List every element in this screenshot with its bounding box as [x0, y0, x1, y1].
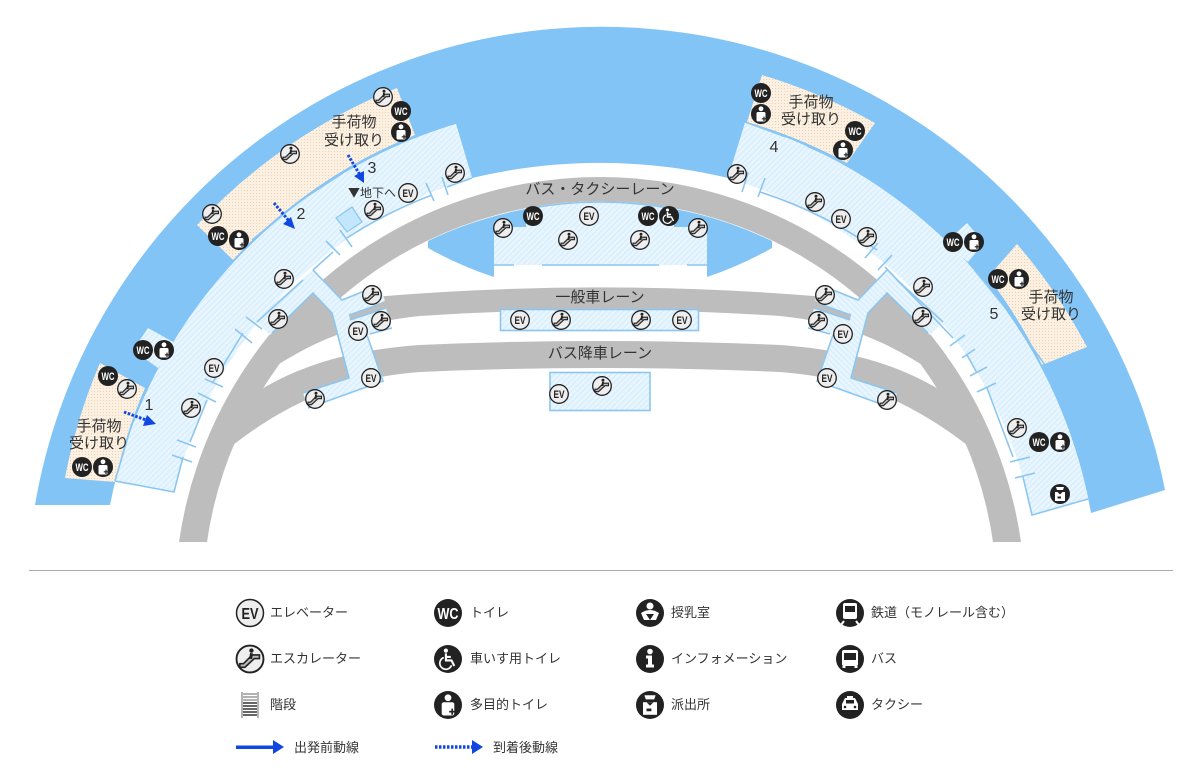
- elevator icons: EV: [208, 363, 220, 375]
- legend: bus: [836, 645, 897, 673]
- baggage claim label lower right: 手荷物: [1028, 289, 1074, 306]
- road label bus drop-off lane: バス降車レーン: [548, 345, 652, 362]
- baggage claim label lower right: [1021, 289, 1081, 323]
- toilet icons: WC: [102, 371, 115, 383]
- baggage claim label upper right: [781, 94, 841, 128]
- baggage claim label lower left: 受け取り: [69, 435, 129, 452]
- baggage claim label lower left: 手荷物: [76, 418, 122, 435]
- multipurpose toilet icons: [93, 104, 1070, 477]
- toilet icons: WC: [212, 231, 225, 243]
- toilet icons: WC: [848, 126, 862, 138]
- legend: taxi: [836, 691, 923, 719]
- elevator icons: EV: [676, 315, 688, 327]
- legend: arrival route: [435, 740, 558, 755]
- baggage claim area: lower right: [988, 244, 1087, 365]
- legend: departure route: [236, 740, 359, 755]
- wheelchair toilet icon: [659, 206, 679, 226]
- divider line: [29, 570, 1173, 571]
- to basement label: ▼地下へ: [348, 184, 396, 201]
- toilet icons: [72, 83, 1049, 477]
- arrival arrow 1: [124, 412, 156, 426]
- toilet icons: WC: [992, 274, 1005, 286]
- legend: wheelchair toilet: 車いす用トイレ: [470, 651, 561, 666]
- escalator icons: [118, 88, 1026, 437]
- gate number 5: 5: [990, 306, 999, 323]
- gray road: general vehicle lane: [270, 287, 930, 370]
- legend: elevator: EV: [242, 606, 259, 623]
- left terminal band: [115, 124, 472, 492]
- legend: bus: バス: [871, 651, 897, 666]
- legend: police box: [636, 691, 710, 719]
- elevator icons: EV: [584, 211, 595, 223]
- elevator icons: EV: [514, 315, 526, 327]
- road label general lane: 一般車レーン: [555, 289, 645, 306]
- legend: escalator: [237, 646, 361, 672]
- terminal map: [35, 27, 1165, 542]
- legend: railway: [836, 599, 1014, 627]
- baggage claim label lower left: [69, 418, 129, 452]
- blue building outline: [35, 27, 1165, 513]
- toilet icons: WC: [642, 211, 655, 223]
- baggage claim label upper left: 手荷物: [331, 114, 377, 131]
- arrival arrow 3: [348, 155, 364, 183]
- legend: nursing room: [636, 599, 710, 627]
- baggage claim area: upper right: [747, 75, 875, 163]
- toilet icons: WC: [394, 106, 408, 118]
- baggage claim label upper right: 手荷物: [788, 94, 834, 111]
- toilet icons: WC: [76, 462, 89, 474]
- legend: toilet: WC: [438, 606, 459, 623]
- road label bus and taxi lane: バス・タクシーレーン: [525, 181, 675, 198]
- gray road: bus drop-off lane: [223, 341, 977, 460]
- baggage claim area: lower left: [65, 363, 145, 482]
- toilet icons: WC: [1032, 437, 1046, 449]
- left connector walkway: [255, 270, 392, 408]
- legend: stairs: 階段: [270, 697, 296, 712]
- gate number 2: 2: [297, 206, 306, 223]
- legend: toilet: トイレ: [470, 605, 509, 620]
- toilet icons: WC: [754, 88, 768, 100]
- elevator icons: EV: [366, 373, 377, 385]
- police box icon: [1050, 484, 1070, 504]
- legend: arrival route: 到着後動線: [493, 740, 558, 755]
- elevator icons: EV: [554, 389, 565, 401]
- legend: toilet: [434, 599, 509, 627]
- gate number 3: 3: [368, 160, 377, 177]
- baggage claim label upper right: 受け取り: [781, 111, 841, 128]
- toilet icons: WC: [526, 211, 540, 223]
- bus drop-off platform: [550, 372, 650, 410]
- gate number 4: 4: [770, 139, 779, 156]
- legend: [236, 599, 1014, 755]
- legend: departure route: 出発前動線: [294, 740, 359, 755]
- baggage claim label upper left: [324, 114, 384, 149]
- toilet icons: WC: [946, 237, 960, 249]
- baggage claim area: upper left: [197, 88, 415, 260]
- right band wall lines: [742, 123, 1088, 515]
- stairwell: [336, 207, 362, 232]
- baggage claim label lower right: 受け取り: [1021, 306, 1081, 323]
- elevator icons: EV: [838, 329, 849, 341]
- curved gray road: bus and taxi lane: [179, 177, 1021, 542]
- right terminal band: [728, 123, 1088, 516]
- legend: nursing room: 授乳室: [671, 605, 710, 620]
- elevator icons: EV: [352, 326, 364, 338]
- center hatched concourse: [494, 202, 707, 265]
- legend: multipurpose toilet: [434, 691, 548, 719]
- legend: multipurpose toilet: 多目的トイレ: [470, 697, 548, 712]
- toilet icons: WC: [136, 345, 150, 357]
- elevator icons: [205, 184, 852, 403]
- gate number 1: 1: [145, 397, 154, 414]
- elevator icons: EV: [822, 373, 833, 385]
- left band wall lines: [115, 137, 472, 492]
- legend: taxi: タクシー: [871, 697, 923, 712]
- baggage claim label upper left: 受け取り: [324, 132, 384, 149]
- legend: information: インフォメーション: [671, 651, 787, 666]
- center blue area: [428, 202, 772, 277]
- legend: elevator: エレベーター: [270, 605, 348, 620]
- restroom annex: right: [945, 223, 984, 262]
- legend: wheelchair toilet: [434, 645, 561, 673]
- general lane platform: [500, 310, 698, 330]
- legend: elevator: [236, 600, 348, 626]
- legend: information: [636, 645, 787, 673]
- legend: railway: 鉄道（モノレール含む）: [871, 605, 1014, 620]
- restroom annex: left: [133, 328, 175, 368]
- elevator icons: EV: [836, 214, 847, 226]
- arrival arrow 2: [274, 203, 295, 229]
- legend: escalator: エスカレーター: [270, 651, 361, 666]
- elevator icons: EV: [402, 188, 414, 200]
- legend: police box: 派出所: [671, 697, 710, 712]
- legend: stairs: [242, 692, 296, 718]
- right connector walkway: [808, 270, 945, 408]
